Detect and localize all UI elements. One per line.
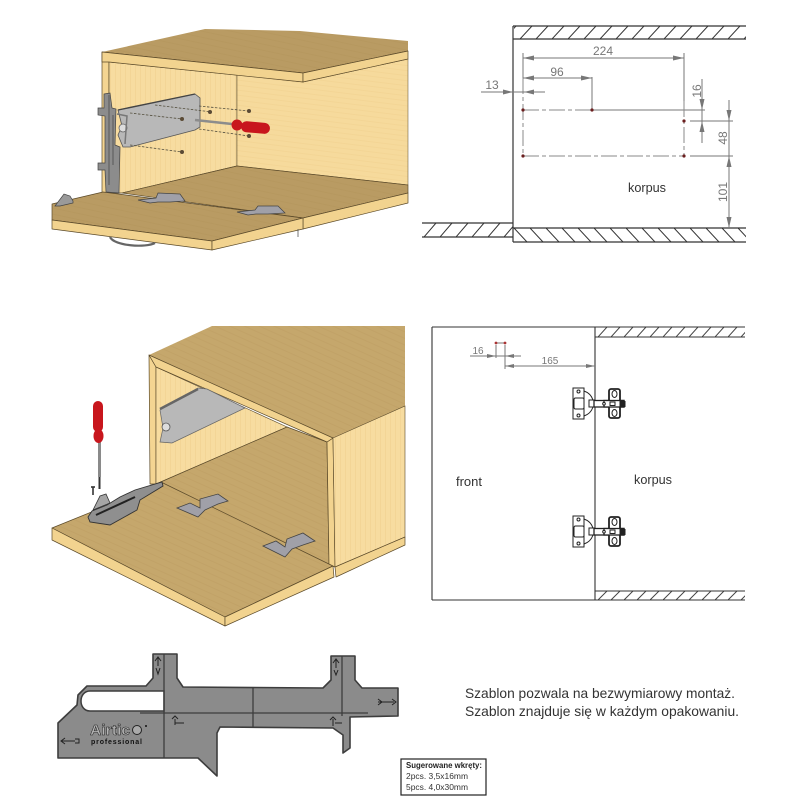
suggested screws box xyxy=(401,759,486,795)
cabinet walls xyxy=(102,52,408,193)
door hinges xyxy=(55,193,285,215)
template fold lines xyxy=(140,654,368,758)
diagram: side wall drilling dimensions xyxy=(422,26,746,242)
drilling guide lines xyxy=(523,53,733,156)
cabinet right side xyxy=(333,406,405,577)
dimension 224: 224 xyxy=(593,44,613,58)
description text xyxy=(465,685,739,719)
dimension 16 xyxy=(690,79,704,143)
template rail xyxy=(98,93,120,193)
cabinet top panel xyxy=(102,29,408,82)
dimension 224 xyxy=(523,44,684,60)
hinge bottom xyxy=(573,516,625,547)
hatched top, bottom and door sections xyxy=(422,26,746,242)
logo: Airtic professional xyxy=(90,722,147,746)
suggested screws box: Sugerowane wkręty: xyxy=(406,761,482,770)
hinge top xyxy=(573,388,625,419)
dimension 13 xyxy=(481,78,545,94)
dimension 16 xyxy=(470,342,521,369)
suggested screws box: 5pcs. 4,0x30mm xyxy=(406,782,468,792)
template on door xyxy=(88,482,163,525)
description text: Szablon znajduje się w każdym opakowaniu. xyxy=(465,703,739,719)
icon: red screwdriver and screw xyxy=(91,401,104,495)
Airtic mounting template xyxy=(58,654,398,776)
label: korpus: korpus xyxy=(628,181,666,195)
illustration: cabinet with template on door xyxy=(52,326,405,626)
dimension 101: 101 xyxy=(716,182,730,202)
mounting screws and dashed guides xyxy=(130,105,251,154)
dimension 165 xyxy=(505,356,595,368)
icon: red screwdriver xyxy=(195,120,270,134)
illustration: cabinet with template on side wall xyxy=(52,29,408,250)
description text: Szablon pozwala na bezwymiarowy montaż. xyxy=(465,685,735,701)
label: front: front xyxy=(456,475,483,489)
dimension 16: 16 xyxy=(472,346,484,357)
dimension 165: 165 xyxy=(542,356,559,367)
diagram: door hinge dimensions xyxy=(432,327,745,600)
dimension 16: 16 xyxy=(690,84,704,98)
template body xyxy=(58,654,398,776)
drill points xyxy=(521,108,686,158)
open front door xyxy=(52,483,334,626)
cabinet top panel xyxy=(149,326,405,442)
template slot xyxy=(81,691,164,711)
cabinet interior walls xyxy=(149,355,335,567)
logo: Airtic professional: Airtic xyxy=(90,722,130,739)
template arrows xyxy=(61,657,396,744)
template plate xyxy=(117,94,200,147)
label: korpus: korpus xyxy=(634,473,672,487)
dimension 48: 48 xyxy=(716,131,730,145)
cabinet floor xyxy=(122,166,408,229)
dimension 96 xyxy=(523,65,592,80)
door hinges xyxy=(177,494,315,557)
dimension 48 xyxy=(716,100,732,228)
logo: Airtic professional: professional xyxy=(91,739,142,746)
suggested screws box: 2pcs. 3,5x16mm xyxy=(406,771,468,781)
door front rectangle and hatched cabinet sections xyxy=(432,327,745,600)
dimension 96: 96 xyxy=(550,65,564,79)
dimension 101 xyxy=(716,182,732,228)
template plate on wall xyxy=(160,388,245,443)
dimension 13: 13 xyxy=(485,78,499,92)
open front door xyxy=(52,192,303,250)
